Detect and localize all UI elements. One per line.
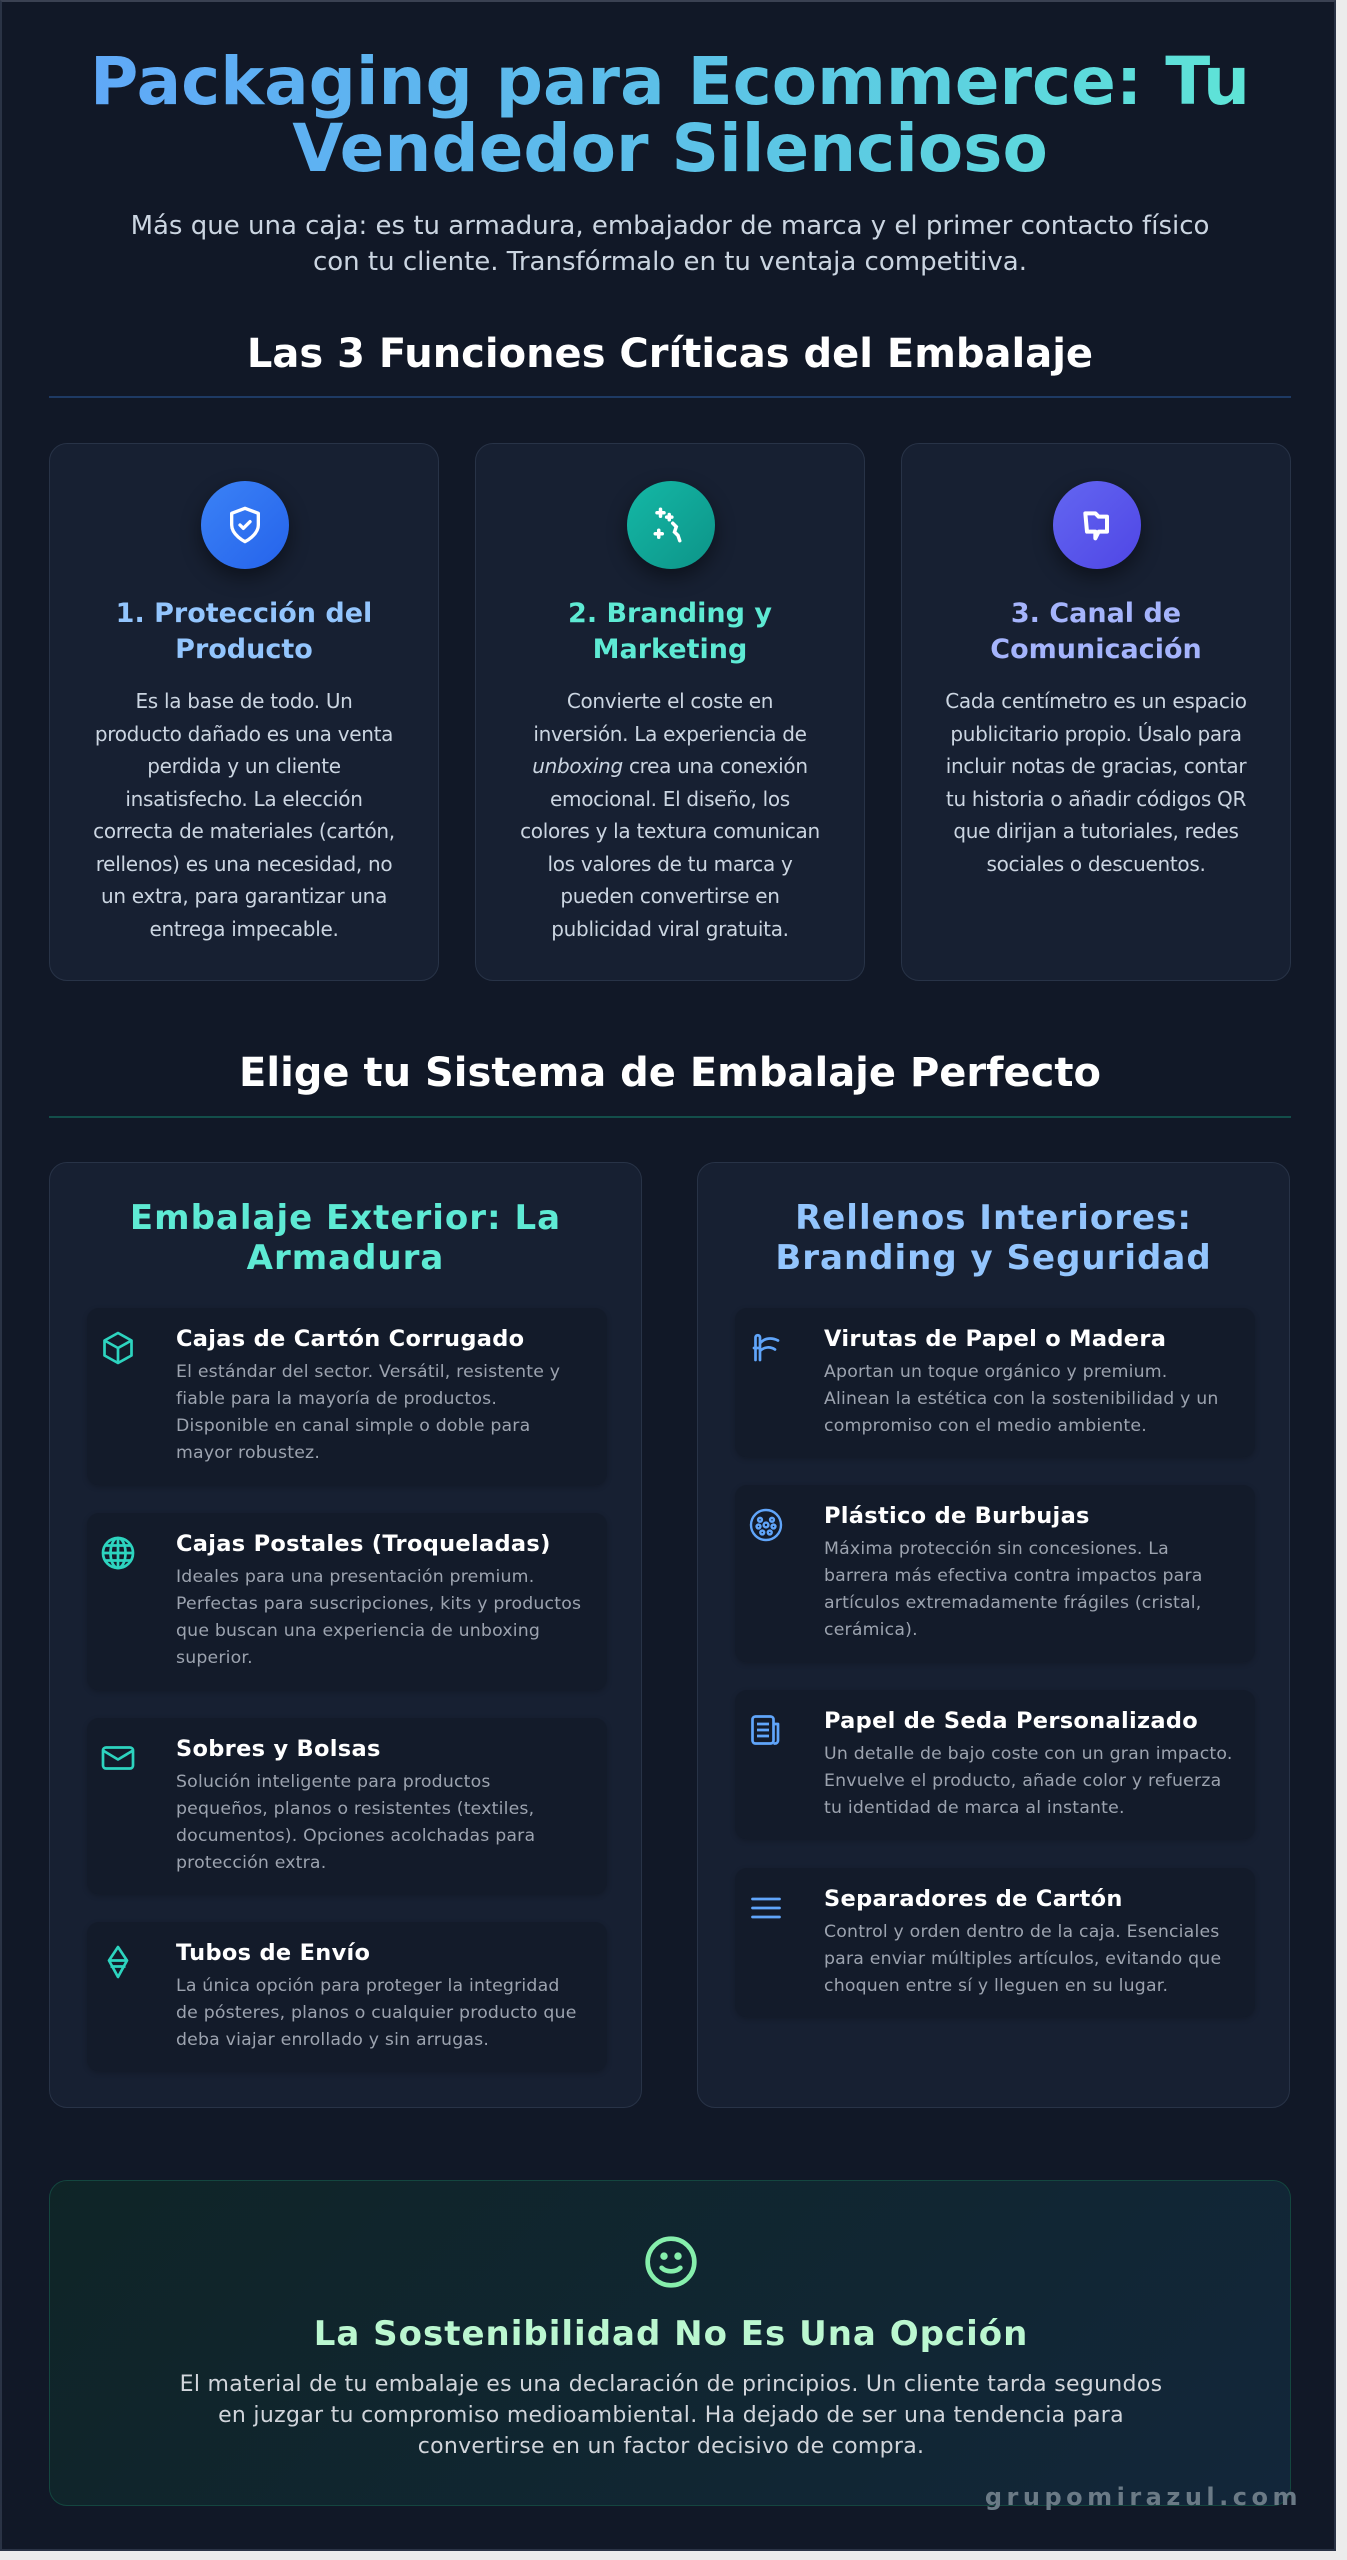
card text: inversión. La experiencia de <box>533 722 807 746</box>
item: cajas postales <box>87 1513 607 1690</box>
panel title: Embalaje Exterior: La Armadura <box>130 1198 561 1278</box>
item: virutas: Alinean la estética con la sostenibilidad y un <box>824 1389 1219 1409</box>
item: cajas carton: fiable para la mayoría de productos. <box>176 1389 497 1409</box>
card text: pueden convertirse en <box>560 884 780 908</box>
title: Vendedor Silencioso <box>292 110 1048 187</box>
card text <box>945 689 1247 876</box>
panel: sostenibilidad <box>49 2180 1291 2506</box>
item: virutas: Aportan un toque orgánico y premium. <box>824 1362 1168 1382</box>
item: cajas carton: Cajas de Cartón Corrugado <box>176 1326 524 1352</box>
item: papel seda: tu identidad de marca al instante. <box>824 1798 1125 1818</box>
card text: rellenos) es una necesidad, no <box>96 852 392 876</box>
panel title: Rellenos Interiores: Branding y Seguridad <box>775 1198 1212 1278</box>
item: separadores <box>735 1868 1255 2017</box>
footer text: en juzgar tu compromiso medioambiental. Ha dejado de ser una tendencia para <box>218 2403 1124 2428</box>
item: virutas <box>735 1308 1255 1457</box>
item: papel seda: Envuelve el producto, añade color y refuerza <box>824 1771 1221 1791</box>
panel: embalaje exterior <box>49 1162 642 2108</box>
item: cajas postales: que buscan una experiencia de unboxing <box>176 1621 540 1641</box>
item: separadores: Control y orden dentro de la caja. Esenciales <box>824 1922 1220 1942</box>
title: Packaging para Ecommerce: Tu <box>90 43 1250 120</box>
item: burbujas: barrera más efectiva contra impactos para <box>824 1566 1203 1586</box>
item: cajas postales: superior. <box>176 1648 253 1668</box>
card text: producto dañado es una venta <box>95 722 393 746</box>
card text <box>520 689 820 940</box>
footer text: El material de tu embalaje es una declaración de principios. Un cliente tarda segundos <box>180 2372 1162 2397</box>
item: burbujas: Máxima protección sin concesiones. La <box>824 1539 1169 1559</box>
card text: Cada centímetro es un espacio <box>945 689 1247 713</box>
card text: perdida y un cliente <box>147 754 341 778</box>
item: sobres: Sobres y Bolsas <box>176 1736 381 1762</box>
subtitle: con tu cliente. Transfórmalo en tu ventaja competitiva. <box>313 247 1027 277</box>
item: sobres <box>87 1718 607 1894</box>
card text: los valores de tu marca y <box>547 852 793 876</box>
item: burbujas: cerámica). <box>824 1620 918 1640</box>
card text: publicidad viral gratuita. <box>551 916 789 940</box>
item: tubos <box>87 1922 607 2071</box>
heading: funciones: Las 3 Funciones Críticas del Embalaje <box>247 331 1093 377</box>
item: papel seda: Un detalle de bajo coste con un gran impacto. <box>824 1744 1233 1764</box>
item: burbujas: artículos extremadamente frágiles (cristal, <box>824 1593 1201 1613</box>
item: papel seda <box>735 1690 1255 1839</box>
card text: insatisfecho. La elección <box>125 786 363 810</box>
item: cajas carton: El estándar del sector. Versátil, resistente y <box>176 1362 560 1382</box>
icon: shield <box>201 481 289 569</box>
item: burbujas: Plástico de Burbujas <box>824 1503 1090 1529</box>
card text: Convierte el coste en <box>567 689 773 713</box>
card text: Es la base de todo. Un <box>135 689 353 713</box>
footer title: La Sostenibilidad No Es Una Opción <box>314 2314 1028 2354</box>
card text: unboxing crea una conexión <box>532 754 808 778</box>
card heading: 3. Canal de Comunicación <box>990 598 1202 665</box>
card text: sociales o descuentos. <box>986 852 1206 876</box>
item: cajas postales: Perfectas para suscripciones, kits y productos <box>176 1594 581 1614</box>
icon: smile <box>645 2236 697 2288</box>
item: cajas postales: Ideales para una presentación premium. <box>176 1567 534 1587</box>
card: comunicacion <box>901 443 1291 981</box>
title <box>2 48 1338 182</box>
card text: un extra, para garantizar una <box>101 884 387 908</box>
card: branding <box>475 443 865 981</box>
icon: chat <box>1053 481 1141 569</box>
footer text: convertirse en un factor decisivo de compra. <box>418 2434 924 2459</box>
item: tubos: La única opción para proteger la integridad <box>176 1976 560 1996</box>
card text: que dirijan a tutoriales, redes <box>953 819 1239 843</box>
subtitle <box>131 211 1209 277</box>
item: sobres: Solución inteligente para productos <box>176 1772 491 1792</box>
item: separadores: Separadores de Cartón <box>824 1886 1123 1912</box>
watermark: grupomirazul.com <box>985 2483 1302 2511</box>
item: burbujas <box>735 1485 1255 1662</box>
panel: rellenos interiores <box>697 1162 1290 2108</box>
item: cajas carton <box>87 1308 607 1485</box>
item: sobres: protección extra. <box>176 1853 326 1873</box>
item: virutas: compromiso con el medio ambiente. <box>824 1416 1147 1436</box>
item: separadores: choquen entre sí y lleguen en su lugar. <box>824 1976 1168 1996</box>
card text: correcta de materiales (cartón, <box>93 819 395 843</box>
card text: emocional. El diseño, los <box>550 786 790 810</box>
card text: publicitario propio. Úsalo para <box>950 722 1242 746</box>
card text: incluir notas de gracias, contar <box>946 754 1246 778</box>
subtitle: Más que una caja: es tu armadura, embajador de marca y el primer contacto físico <box>131 211 1209 241</box>
item: sobres: documentos). Opciones acolchadas para <box>176 1826 535 1846</box>
item: tubos: de pósteres, planos o cualquier producto que <box>176 2003 577 2023</box>
item: papel seda: Papel de Seda Personalizado <box>824 1708 1198 1734</box>
footer text <box>180 2372 1162 2459</box>
icon: sparkles <box>627 481 715 569</box>
card text <box>93 689 395 940</box>
card heading: 2. Branding y Marketing <box>568 598 772 665</box>
item: cajas postales: Cajas Postales (Troqueladas) <box>176 1531 551 1557</box>
item: sobres: pequeños, planos o resistentes (textiles, <box>176 1799 534 1819</box>
card heading: 1. Protección del Producto <box>116 598 372 665</box>
item: cajas carton: Disponible en canal simple o doble para <box>176 1416 530 1436</box>
item: tubos: Tubos de Envío <box>176 1940 370 1966</box>
item: tubos: deba viajar enrollado y sin arrugas. <box>176 2030 489 2050</box>
item: virutas: Virutas de Papel o Madera <box>824 1326 1166 1352</box>
card text: entrega impecable. <box>149 916 339 940</box>
item: separadores: para enviar múltiples artículos, evitando que <box>824 1949 1221 1969</box>
heading: sistema: Elige tu Sistema de Embalaje Perfecto <box>239 1050 1101 1096</box>
card text: tu historia o añadir códigos QR <box>946 786 1246 810</box>
card: proteccion <box>49 443 439 981</box>
item: cajas carton: mayor robustez. <box>176 1443 320 1463</box>
card text: colores y la textura comunican <box>520 819 820 843</box>
